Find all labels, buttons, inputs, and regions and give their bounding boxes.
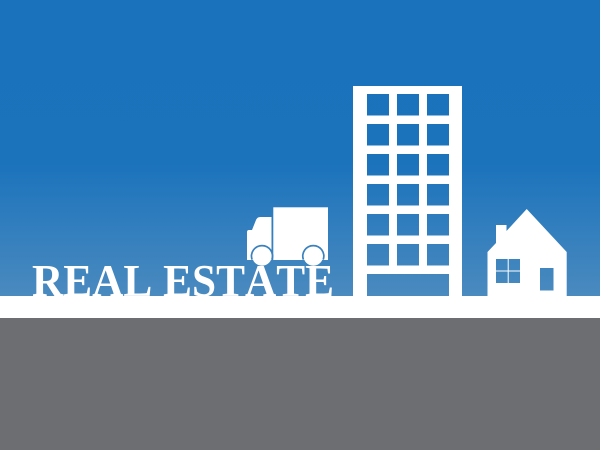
- title: REAL ESTATE: [32, 255, 334, 306]
- truck cargo box: [273, 207, 328, 260]
- truck wheel front: [252, 246, 272, 266]
- icon: office building: [353, 86, 462, 297]
- icon: delivery truck: [247, 207, 328, 266]
- icon: house: [488, 209, 567, 297]
- sky background: [0, 0, 600, 296]
- truck wheel rear: [303, 246, 324, 266]
- truck cab: [247, 217, 272, 260]
- white ground band: [0, 296, 600, 318]
- grey road: [0, 318, 600, 450]
